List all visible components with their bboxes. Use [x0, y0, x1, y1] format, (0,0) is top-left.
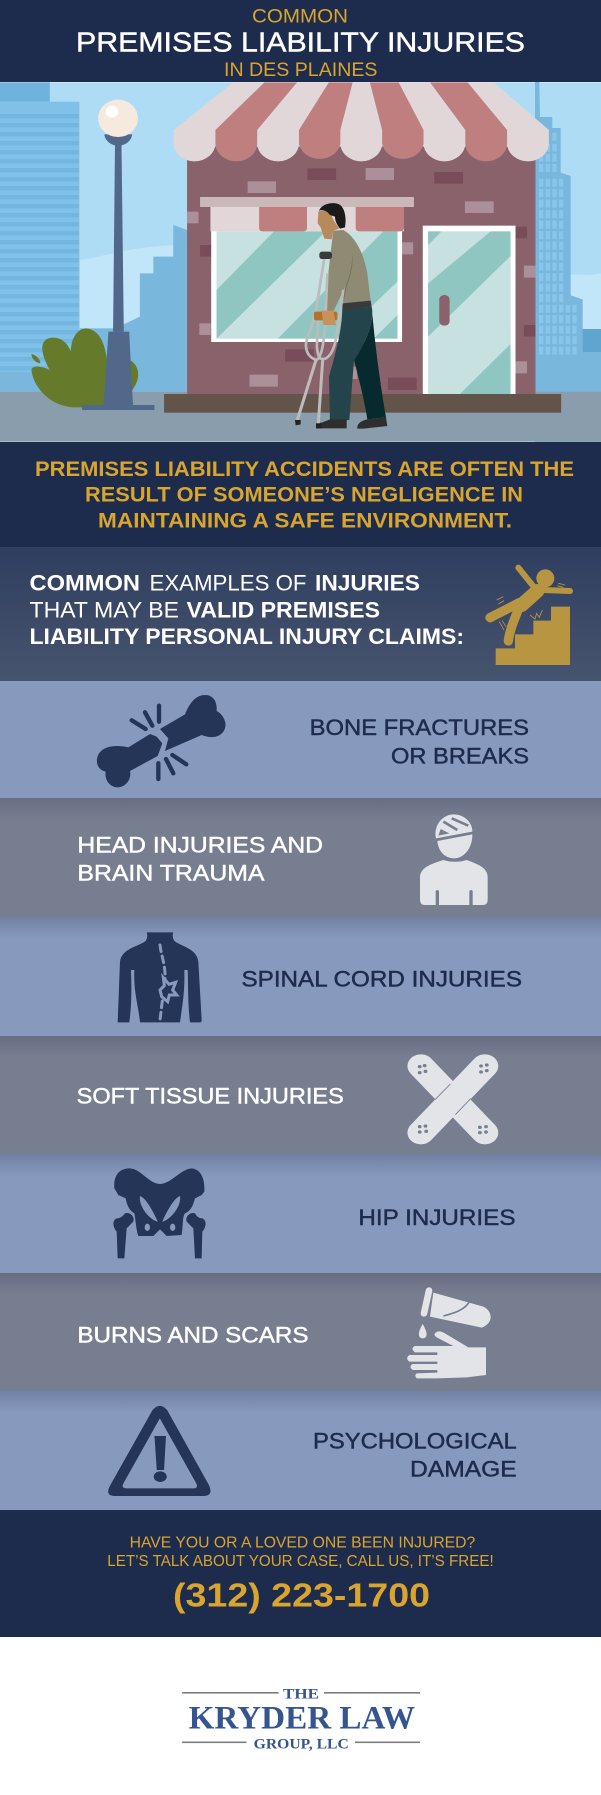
- banner: negligence statement: RESULT OF SOMEONE’S NEGLIGENCE IN: [85, 483, 523, 507]
- intro heading: LIABILITY PERSONAL INJURY CLAIMS:: [30, 624, 464, 649]
- bush: [31, 328, 138, 407]
- row: burns and scars: [0, 1273, 601, 1391]
- row: head injuries: [0, 798, 601, 917]
- intro heading: COMMON: [30, 571, 140, 596]
- call to action text: LET’S TALK ABOUT YOUR CASE, CALL US, IT’S FREE!: [107, 1553, 494, 1570]
- label: head injuries: HEAD INJURIES AND: [77, 833, 323, 858]
- footer logo: the kryder law group: GROUP, LLC: [254, 1736, 349, 1752]
- phone number: (312) 223-1700: [173, 1577, 430, 1614]
- striped awning: [174, 82, 549, 161]
- intro heading: [30, 571, 464, 649]
- icon: chemical on hand: [407, 1291, 491, 1378]
- call to action text: HAVE YOU OR A LOVED ONE BEEN INJURED?: [130, 1534, 475, 1551]
- row: psychological damage: [0, 1391, 601, 1510]
- intro heading: INJURIES: [315, 571, 420, 596]
- footer logo: the kryder law group: KRYDER LAW: [189, 1700, 415, 1736]
- intro heading: THAT MAY BE: [30, 598, 179, 623]
- label: soft tissue injuries: SOFT TISSUE INJURIES: [77, 1083, 344, 1108]
- label: bone fractures: BONE FRACTURES: [310, 715, 529, 740]
- call to action panel: [0, 1510, 601, 1637]
- icon: pelvis: [113, 1168, 206, 1258]
- row: soft tissue injuries: [0, 1036, 601, 1155]
- label: bone fractures: [310, 715, 529, 768]
- title: PREMISES LIABILITY INJURIES: [76, 27, 525, 58]
- storefront, lamp and bush: [0, 82, 601, 442]
- shop door: [423, 226, 516, 394]
- street lamp: [82, 100, 154, 410]
- row: bone fractures: [0, 681, 601, 798]
- label: hip injuries: HIP INJURIES: [358, 1205, 516, 1230]
- label: head injuries: [77, 833, 323, 886]
- icon: spine and back: [118, 932, 202, 1022]
- header banner: [0, 0, 601, 82]
- shop wall: [187, 147, 535, 394]
- footer logo: the kryder law group: THE: [283, 1686, 319, 1702]
- label: psychological damage: PSYCHOLOGICAL: [313, 1428, 517, 1453]
- label: spinal cord injuries: SPINAL CORD INJURIES: [242, 967, 522, 992]
- icon: crossed bandages: [418, 1063, 489, 1134]
- header line: location: IN DES PLAINES: [224, 59, 378, 81]
- intro heading: VALID PREMISES: [187, 598, 380, 623]
- icon: person falling on stairs: [490, 568, 570, 665]
- banner: negligence statement: [0, 442, 601, 547]
- shop window: [200, 197, 414, 342]
- shop step: [164, 394, 561, 413]
- man on crutches: [295, 203, 387, 429]
- label: bone fractures: OR BREAKS: [391, 743, 529, 768]
- call to action text: [107, 1534, 494, 1570]
- sky and background city: [0, 82, 601, 442]
- icon: warning triangle: [108, 1406, 210, 1496]
- label: psychological damage: [313, 1428, 517, 1482]
- banner: negligence statement: PREMISES LIABILITY ACCIDENTS ARE OFTEN THE: [35, 457, 574, 481]
- footer logo: the kryder law group: [0, 1637, 601, 1795]
- label: burns and scars: BURNS AND SCARS: [77, 1322, 309, 1347]
- row: hip injuries: [0, 1155, 601, 1273]
- icon: bandaged head: [420, 814, 488, 905]
- banner: negligence statement: MAINTAINING A SAFE ENVIRONMENT.: [98, 508, 512, 532]
- background building: right tower: [535, 82, 601, 442]
- illustration: storefront street scene: [0, 82, 601, 442]
- row: spinal cord injuries: [0, 917, 601, 1036]
- label: head injuries: BRAIN TRAUMA: [77, 861, 265, 886]
- header line: common: COMMON: [252, 7, 348, 28]
- icon: broken bone: [97, 695, 225, 787]
- label: psychological damage: DAMAGE: [410, 1457, 517, 1482]
- intro heading: EXAMPLES OF: [150, 571, 306, 596]
- panel: common examples intro: [0, 547, 601, 681]
